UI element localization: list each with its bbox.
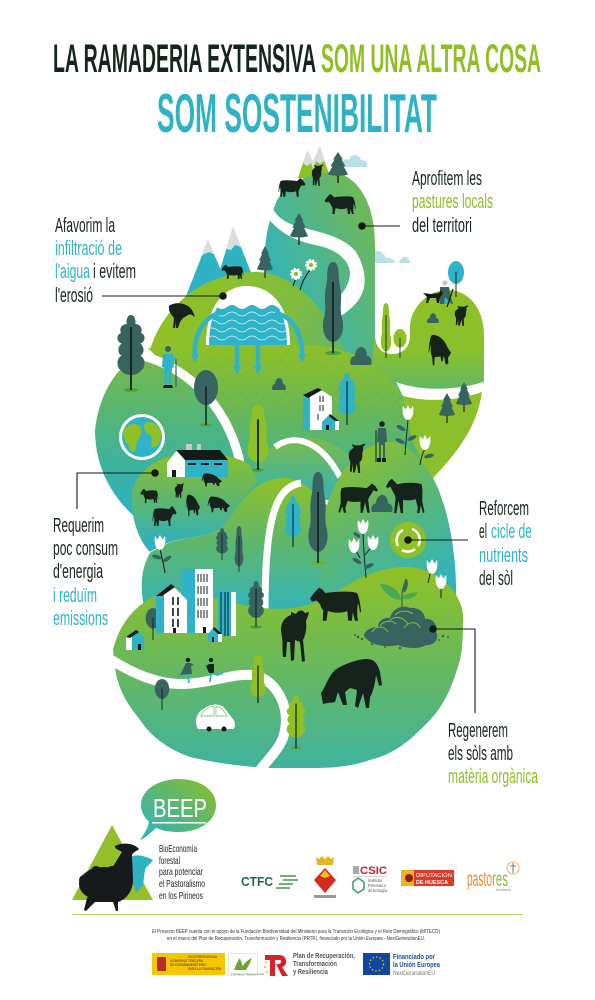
Gobierno de España logo: PARA LA TRANSICIÓN bbox=[188, 966, 222, 971]
Gobierno de España logo: MINISTERIO bbox=[188, 963, 207, 967]
lime lower right slope bbox=[380, 392, 482, 480]
farmer bbox=[162, 346, 176, 388]
cows on summit bbox=[278, 178, 305, 197]
farm hill bbox=[132, 453, 258, 552]
water dome infiltration bbox=[191, 286, 306, 375]
EU flag logo: la Unión Europea bbox=[393, 960, 441, 969]
lime round tree bbox=[393, 329, 407, 358]
front hill road bbox=[108, 658, 286, 770]
text bbox=[53, 514, 118, 630]
text: del territori bbox=[412, 214, 472, 237]
funding statement bbox=[152, 929, 440, 942]
BEEP logo bbox=[72, 779, 216, 911]
centre and city hill bbox=[142, 478, 400, 612]
pine behind hill bbox=[257, 246, 273, 278]
text: d'energia bbox=[53, 560, 103, 583]
right hill cows bbox=[455, 305, 468, 326]
text: Regenerem bbox=[448, 719, 508, 742]
car bbox=[196, 704, 235, 732]
round road tree bbox=[155, 679, 169, 710]
front cow summit bbox=[312, 164, 324, 186]
BEEP tagline: BioEconomía bbox=[159, 843, 197, 855]
leader bbox=[358, 222, 400, 230]
Pastores logo: fundación bbox=[496, 888, 511, 892]
clouds bbox=[340, 155, 410, 263]
EU flag logo: NextGenerationEU bbox=[393, 970, 435, 977]
buildings bbox=[126, 388, 339, 650]
text: cicle de bbox=[491, 520, 532, 543]
Plan de Recuperación logo: Transformación bbox=[293, 961, 337, 968]
callout: energia bbox=[53, 469, 159, 630]
BEEP wordmark: BEEP bbox=[153, 793, 207, 823]
centre cypress bbox=[308, 472, 328, 565]
text: emissions bbox=[53, 607, 108, 630]
callout: nutrients bbox=[404, 497, 532, 590]
flowers bbox=[152, 260, 446, 598]
CSIC logo: CSIC bbox=[360, 865, 387, 877]
farm cow 2 bbox=[153, 506, 177, 526]
partner logos bbox=[241, 856, 519, 898]
Fundación Biodiversidad logo: Fundación Biodiversidad bbox=[231, 972, 264, 976]
arrow heads bbox=[191, 354, 306, 375]
EU flag logo: Financiado por bbox=[393, 952, 435, 961]
EU flag logo bbox=[363, 952, 441, 977]
text: Requerim bbox=[53, 514, 104, 537]
BEEP tagline bbox=[159, 843, 205, 902]
Diputación de Huesca logo bbox=[401, 870, 454, 886]
text: Reforcem bbox=[479, 497, 529, 520]
small oak bbox=[216, 528, 228, 560]
teal oak centre bbox=[285, 496, 301, 547]
white house bbox=[303, 388, 339, 430]
sheep bbox=[349, 444, 366, 473]
dark oak left bbox=[117, 315, 145, 392]
centre road bbox=[265, 483, 301, 610]
leader bbox=[404, 536, 468, 544]
cow summit 3 bbox=[325, 194, 356, 214]
Gobierno de España logo bbox=[152, 953, 225, 975]
small house left bbox=[126, 630, 144, 650]
right hill bbox=[370, 290, 484, 400]
leader bbox=[102, 292, 227, 300]
text bbox=[55, 214, 136, 307]
tulips right bbox=[395, 405, 434, 465]
back hill with arc road bbox=[250, 437, 362, 500]
right hill road bbox=[396, 382, 483, 400]
text bbox=[448, 719, 538, 788]
callout: infiltració bbox=[55, 214, 227, 307]
footer divider bbox=[72, 914, 523, 915]
round dark tree bbox=[194, 370, 218, 427]
CSIC logo: de Ecología bbox=[368, 888, 387, 893]
text bbox=[479, 497, 532, 590]
text: Afavorim la bbox=[55, 214, 115, 237]
Plan de Recuperación logo: Plan de Recuperación, bbox=[293, 953, 355, 960]
trees bbox=[117, 152, 472, 749]
globe icon bbox=[119, 414, 165, 460]
text: pastures locals bbox=[412, 190, 493, 213]
water hill bbox=[150, 272, 345, 350]
tall cypress bbox=[323, 262, 343, 355]
teal sheep bbox=[130, 855, 153, 893]
top mountains bbox=[298, 146, 330, 178]
BEEP tagline: en los Pirineos bbox=[159, 890, 203, 902]
people bbox=[162, 280, 453, 683]
title: LA RAMADERIA EXTENSIVA bbox=[53, 37, 316, 81]
BEEP tagline: forestal bbox=[159, 855, 180, 867]
pine right 1 bbox=[439, 393, 455, 423]
CTFC logo: CTFC bbox=[241, 874, 274, 889]
left lobe ticks bbox=[95, 353, 245, 520]
landscape illustration bbox=[95, 146, 484, 770]
pines top bbox=[290, 213, 308, 245]
text: i reduïm bbox=[53, 584, 97, 607]
lime road tree bbox=[250, 655, 266, 703]
CSIC logo: Pirenaico bbox=[368, 883, 386, 888]
city towers bbox=[156, 569, 236, 636]
text: i evitem bbox=[93, 260, 136, 283]
grass hill bbox=[148, 345, 430, 500]
tulip cluster bbox=[349, 519, 378, 578]
wordmark underline bbox=[152, 822, 206, 824]
soil pile bbox=[364, 607, 437, 648]
small house city bbox=[208, 627, 222, 642]
black sheep bbox=[79, 844, 139, 911]
text: nutrients bbox=[479, 544, 528, 567]
farm cow 3 bbox=[175, 483, 184, 498]
Gobierno de España logo: GOBIERNO bbox=[170, 959, 188, 963]
text: poc consum bbox=[53, 537, 118, 560]
leader bbox=[77, 469, 159, 509]
infiltration arrows bbox=[195, 313, 302, 368]
lime oak bottom bbox=[287, 695, 305, 749]
right hill grazing cow bbox=[429, 335, 451, 366]
speech bubble bbox=[140, 779, 216, 840]
text: el bbox=[479, 520, 487, 543]
soil highlights bbox=[372, 611, 420, 632]
Gobierno de España logo: VICEPRESIDENCIA bbox=[188, 955, 218, 959]
sheep hill bbox=[320, 442, 456, 610]
small cypress bbox=[235, 526, 243, 572]
callout: pastures bbox=[358, 167, 493, 237]
title bbox=[53, 37, 541, 144]
front bottom hill bbox=[113, 567, 463, 768]
big cows bbox=[310, 588, 361, 621]
text: infiltració de bbox=[55, 237, 122, 260]
big front cow bbox=[281, 610, 309, 662]
middle teal mountains bbox=[186, 227, 256, 296]
text: l'erosió bbox=[55, 284, 93, 307]
tulip left bbox=[152, 535, 172, 573]
soil specks bbox=[354, 634, 449, 649]
bushes bbox=[272, 313, 439, 512]
seated shepherd with dog bbox=[423, 280, 453, 307]
farm cows bbox=[140, 489, 158, 503]
nutrient cycle icon bbox=[390, 522, 426, 558]
Diputación de Huesca logo: DE HUESCA bbox=[416, 880, 448, 886]
text: del sòl bbox=[479, 567, 513, 590]
left lobe hill bbox=[95, 353, 245, 520]
winding road left bbox=[138, 355, 240, 462]
oak city bbox=[248, 581, 264, 629]
Gobierno de España logo: TERCERA bbox=[188, 959, 204, 963]
white dome bbox=[206, 286, 290, 345]
BEEP tagline: para potenciar bbox=[159, 866, 203, 878]
animals bbox=[140, 164, 469, 708]
leader bbox=[429, 625, 475, 713]
top hill bbox=[265, 172, 392, 400]
Fundación Biodiversidad logo bbox=[228, 954, 264, 976]
Plan de Recuperación logo: y Resiliencia bbox=[293, 969, 328, 976]
lime tree centre bbox=[247, 405, 269, 472]
teal round tree bbox=[448, 261, 464, 297]
black cow by dome bbox=[169, 303, 195, 328]
funder logos bbox=[152, 952, 441, 977]
BEEP tagline: el Pastoralismo bbox=[159, 878, 205, 890]
Pastores logo: res bbox=[492, 868, 508, 891]
pine summit bbox=[328, 152, 348, 183]
round city tree bbox=[146, 608, 160, 640]
farm cow 6 bbox=[202, 473, 222, 487]
tulips by compost bbox=[427, 559, 446, 598]
small cow mountain bbox=[221, 265, 243, 279]
green triangle bbox=[72, 825, 153, 900]
funding statement: El Proyecto BEEP cuenta con el apoyo de la Fundación Biodiversidad del Ministerio para la Transición Ecológica y el Reto Demográfico (MITECO) bbox=[152, 929, 440, 935]
funding statement: en el marco del Plan de Recuperación, Transformación y Resiliencia (PRTR), financiado por la Unión Europea - NextGenerationEU. bbox=[167, 936, 425, 942]
goat 2 bbox=[386, 479, 424, 513]
callout: matèria orgànica bbox=[429, 625, 538, 788]
Diputación de Huesca logo: DIPUTACIÓN bbox=[416, 872, 452, 879]
CSIC logo: Instituto bbox=[368, 878, 382, 883]
text bbox=[412, 167, 493, 237]
CSIC logo bbox=[353, 865, 387, 893]
goats bbox=[338, 484, 378, 513]
compost with sprout bbox=[354, 579, 449, 649]
text: l'aigua bbox=[55, 260, 90, 283]
coat of arms bbox=[314, 856, 336, 898]
CTFC logo bbox=[241, 874, 298, 889]
shepherdess bbox=[376, 421, 387, 462]
farm cow 4 bbox=[186, 495, 200, 516]
Pastores logo: pasto bbox=[467, 868, 492, 891]
pine right 2 bbox=[456, 382, 472, 412]
Gobierno de España logo: DE ESPAÑA bbox=[170, 962, 189, 967]
Plan de Recuperación logo bbox=[264, 953, 355, 976]
teal oak bbox=[338, 373, 356, 425]
sprout bbox=[380, 579, 418, 607]
farm building bbox=[167, 444, 228, 477]
text: Aprofitem les bbox=[412, 167, 482, 190]
big grazing cow bbox=[321, 659, 382, 708]
farm cow 5 bbox=[208, 496, 230, 513]
daisies bbox=[291, 260, 316, 290]
text: els sòls amb bbox=[448, 742, 513, 765]
top hill road bbox=[268, 206, 365, 316]
water with waves bbox=[207, 305, 287, 346]
lime narrow tree bbox=[381, 303, 391, 358]
running children bbox=[178, 658, 223, 683]
